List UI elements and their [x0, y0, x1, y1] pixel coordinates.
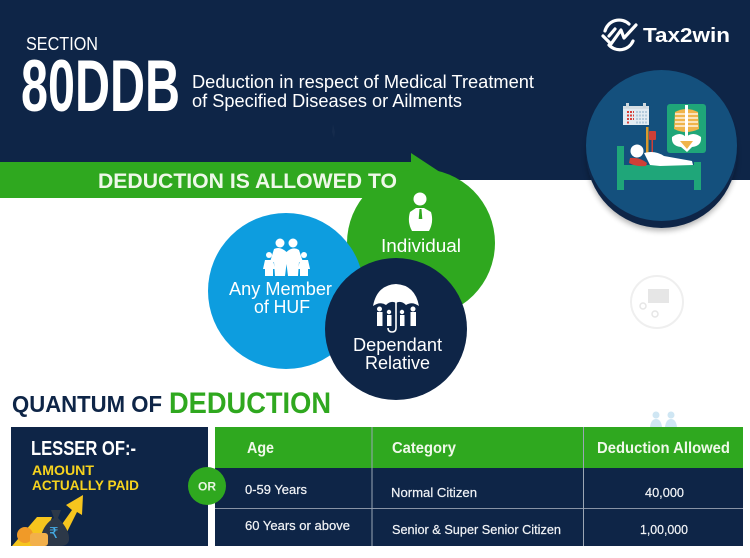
table row 1: Normal Citizen — [391, 485, 477, 500]
icon: calendar — [623, 103, 649, 125]
icon: drip stand — [646, 127, 656, 157]
circle: any member of HUF — [208, 213, 364, 369]
banner: deduction is allowed to — [0, 124, 460, 198]
icon: umbrella — [373, 284, 419, 332]
header band — [0, 0, 750, 180]
subtitle: Deduction in respect of Medical Treatment — [192, 72, 534, 92]
table header — [247, 440, 730, 457]
circle: dependant relative — [325, 258, 467, 400]
icon: family — [263, 238, 310, 276]
circle: dependant relative: Dependant — [353, 335, 442, 355]
circle: individual — [347, 169, 495, 317]
section label: SECTION — [26, 33, 98, 54]
subtitle — [192, 72, 534, 111]
logo: Tax2win: Tax2win — [643, 25, 730, 47]
heading: quantum of deduction: DEDUCTION — [169, 387, 331, 420]
icon: person — [409, 192, 432, 231]
banner text: DEDUCTION IS ALLOWED TO — [98, 169, 397, 193]
faint mark — [332, 124, 335, 138]
table row 2: 60 Years or above — [245, 518, 350, 533]
faint watermark icon — [631, 276, 683, 328]
icon: bed — [617, 146, 701, 190]
circle: dependant relative: Relative — [365, 353, 430, 373]
icon: patient — [629, 144, 693, 166]
circle: any member of HUF: of HUF — [254, 297, 310, 317]
OR badge — [188, 467, 226, 505]
logo: Tax2win — [603, 20, 730, 50]
table header: Age — [247, 440, 274, 457]
subtitle: of Specified Diseases or Ailments — [192, 91, 462, 111]
icon: money bag and arrow — [12, 495, 83, 546]
table header: Deduction Allowed — [597, 440, 730, 457]
table row 1 — [245, 482, 684, 500]
panel: lesser of — [11, 427, 208, 546]
icon: x-ray — [667, 104, 706, 153]
heading: quantum of deduction — [12, 387, 331, 420]
table row 2: Senior & Super Senior Citizen — [392, 522, 561, 537]
title: 80DDB: 80DDB — [21, 46, 180, 127]
faint people watermark — [650, 412, 677, 427]
table row 2 — [245, 518, 688, 537]
table row 2: 1,00,000 — [640, 522, 688, 537]
panel: lesser of: LESSER OF:- — [31, 438, 136, 460]
table row 1: 40,000 — [645, 485, 684, 500]
table — [215, 427, 743, 546]
table header: Category — [392, 440, 456, 457]
circle: any member of HUF: Any Member — [229, 279, 332, 299]
circle: individual: Individual — [381, 236, 461, 256]
OR badge: OR — [198, 480, 216, 494]
table row 1: 0-59 Years — [245, 482, 307, 497]
icon: money bag and arrow: ₹ — [49, 525, 59, 542]
panel: lesser of: AMOUNT — [32, 462, 94, 478]
medical illustration badge — [586, 70, 737, 231]
panel: lesser of: ACTUALLY PAID — [32, 477, 139, 493]
heading: quantum of deduction: QUANTUM OF — [12, 391, 162, 417]
